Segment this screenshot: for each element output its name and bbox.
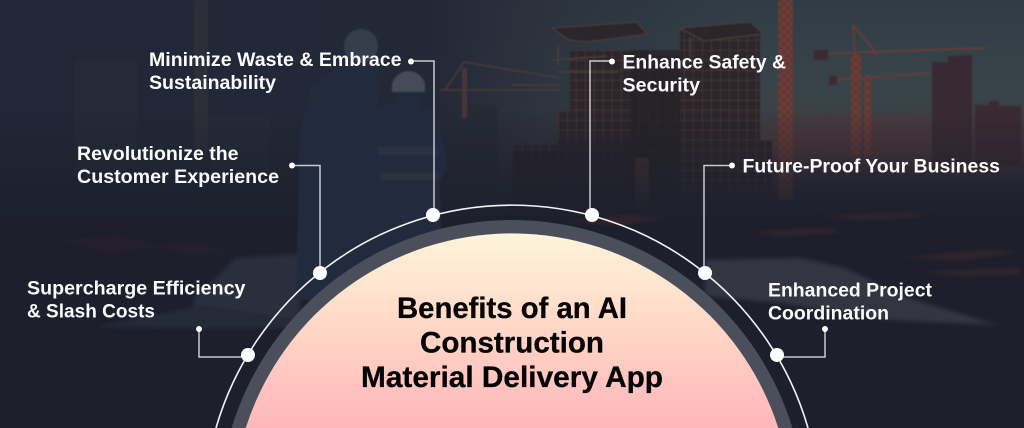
callout: Supercharge Efficiency & Slash Costs (27, 278, 255, 362)
callout: Enhanced Project Coordination: Coordination (768, 304, 889, 324)
title: Construction (420, 326, 604, 360)
callout: Enhanced Project Coordination (768, 280, 933, 362)
callout: Enhance Safety & Security (585, 52, 786, 222)
callout: Revolutionize the Customer Experience (77, 144, 327, 280)
callout: Enhance Safety & Security: Security (622, 76, 700, 96)
callout: Future-Proof Your Business (698, 156, 1000, 280)
outer thin arc (216, 205, 808, 428)
callout: Minimize Waste & Embrace Sustainability: Sustainability (149, 73, 276, 94)
callout: Revolutionize the Customer Experience: Customer Experience (77, 167, 279, 188)
callout: Supercharge Efficiency & Slash Costs: Supercharge Efficiency (27, 278, 246, 300)
callout: Supercharge Efficiency & Slash Costs: & Slash Costs (27, 302, 155, 322)
callout: Minimize Waste & Embrace Sustainability: Minimize Waste & Embrace (149, 50, 402, 71)
gray ring (232, 220, 792, 428)
central semicircle with title (246, 233, 778, 428)
callout: Revolutionize the Customer Experience: Revolutionize the (77, 144, 238, 165)
title: Material Delivery App (361, 361, 663, 394)
callout: Enhance Safety & Security: Enhance Safety & (622, 52, 786, 74)
title: Benefits of an AI (397, 292, 627, 325)
callout: Enhanced Project Coordination: Enhanced Project (768, 280, 933, 302)
title (361, 292, 663, 394)
callout: Future-Proof Your Business: Future-Proof Your Business (742, 156, 1000, 178)
callout: Minimize Waste & Embrace Sustainability (149, 50, 440, 222)
